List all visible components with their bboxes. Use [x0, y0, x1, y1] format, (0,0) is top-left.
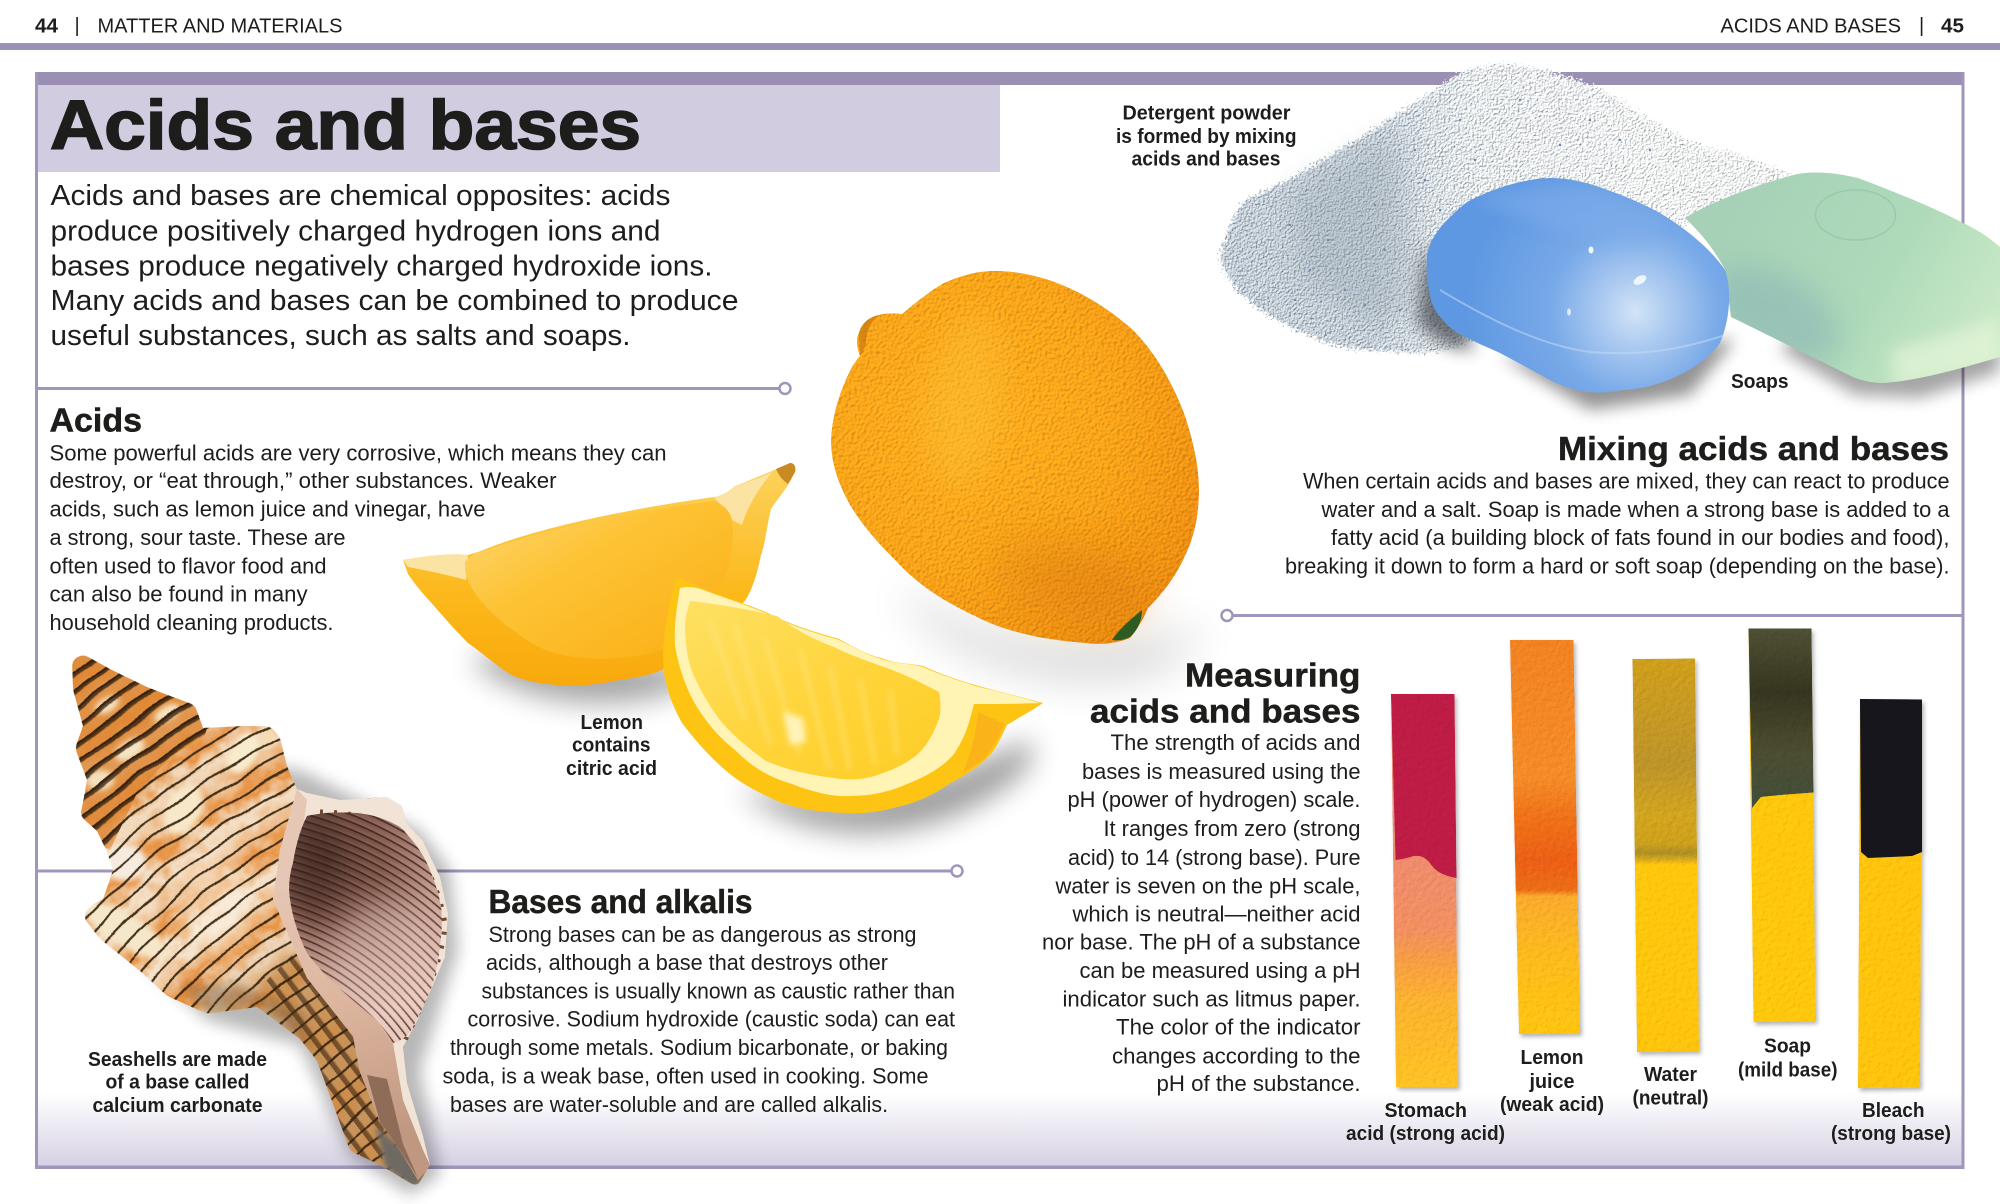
caption: detergent powder — [1116, 102, 1296, 170]
section: mixing acids and bases: water and a salt. Soap is made when a strong base is added to a — [1321, 497, 1950, 522]
pH strip: soap — [1748, 628, 1816, 1022]
section: measuring acids and bases: can be measured using a pH — [1080, 958, 1360, 983]
caption: soaps: Soaps — [1731, 371, 1788, 393]
caption: lemon juice: juice — [1529, 1071, 1574, 1093]
page header: 45 — [1941, 16, 1964, 38]
caption: bleach — [1831, 1100, 1951, 1145]
section: measuring acids and bases: indicator such as litmus paper. — [1062, 986, 1360, 1012]
section: measuring acids and bases: Measuring — [1185, 656, 1360, 694]
section: acids: household cleaning products. — [50, 610, 334, 635]
caption: lemon: citric acid — [566, 758, 657, 780]
caption: lemon juice: Lemon — [1520, 1047, 1584, 1069]
caption: stomach acid — [1346, 1100, 1505, 1145]
intro text: useful substances, such as salts and soaps. — [50, 320, 630, 352]
section: measuring acids and bases: acid) to 14 (strong base). Pure — [1068, 845, 1360, 870]
caption: soap — [1738, 1036, 1838, 1082]
intro text: Many acids and bases can be combined to produce — [50, 285, 738, 317]
caption: soap: (mild base) — [1738, 1060, 1838, 1082]
photo: whole lemon — [831, 271, 1200, 674]
page header — [0, 15, 2000, 50]
section: measuring acids and bases: bases is measured using the — [1082, 759, 1360, 784]
caption: detergent powder: acids and bases — [1132, 148, 1280, 170]
section: measuring acids and bases: It ranges from zero (strong — [1104, 816, 1360, 841]
section: bases and alkalis: bases are water-soluble and are called alkalis. — [450, 1092, 888, 1117]
caption: water — [1632, 1064, 1708, 1110]
section: mixing acids and bases: breaking it down to form a hard or soft soap (depending on the base). — [1285, 554, 1950, 578]
pH strip: stomach acid — [1391, 694, 1458, 1087]
photo: lemon wedge front — [663, 578, 1043, 833]
section: bases and alkalis: Strong bases can be as dangerous as strong — [488, 922, 916, 947]
section: mixing acids and bases: Mixing acids and bases — [1558, 430, 1949, 467]
title — [38, 85, 1000, 172]
section: acids: can also be found in many — [50, 582, 308, 606]
section: measuring acids and bases: water is seven on the pH scale, — [1055, 874, 1360, 898]
section: bases and alkalis: through some metals. Sodium bicarbonate, or baking — [450, 1035, 948, 1060]
pH strip: lemon juice — [1510, 640, 1580, 1034]
page header: | — [74, 15, 80, 37]
section: acids: destroy, or “eat through,” other substances. Weaker — [50, 468, 556, 493]
intro text: Acids and bases are chemical opposites: acids — [50, 180, 670, 212]
section: measuring acids and bases: The color of the indicator — [1116, 1014, 1360, 1040]
caption: bleach: (strong base) — [1831, 1123, 1951, 1145]
section: mixing acids and bases — [1285, 430, 1950, 578]
caption: water: Water — [1644, 1064, 1697, 1086]
section: acids: often used to flavor food and — [50, 554, 326, 578]
caption: seashell: of a base called — [106, 1072, 250, 1094]
caption: stomach acid: Stomach — [1384, 1100, 1467, 1122]
intro text: produce positively charged hydrogen ions and — [50, 216, 660, 248]
caption: lemon juice: (weak acid) — [1500, 1094, 1604, 1116]
section: measuring acids and bases: acids and bases — [1090, 692, 1360, 730]
photo: seashell — [60, 640, 460, 1200]
photo: green soap — [1680, 165, 2000, 398]
section: bases and alkalis — [442, 883, 955, 1117]
section: measuring acids and bases: nor base. The pH of a substance — [1042, 930, 1360, 954]
intro text — [50, 180, 738, 352]
caption: water: (neutral) — [1632, 1088, 1708, 1110]
intro text: bases produce negatively charged hydroxide ions. — [50, 250, 712, 282]
caption: stomach acid: acid (strong acid) — [1346, 1123, 1505, 1145]
caption: bleach: Bleach — [1862, 1100, 1924, 1122]
pH strip: bleach — [1858, 699, 1922, 1088]
caption: lemon juice — [1500, 1047, 1604, 1116]
caption: lemon: contains — [572, 734, 650, 756]
photo: detergent powder — [1220, 65, 1792, 353]
page header: | — [1919, 15, 1924, 37]
divider with end circle — [38, 866, 962, 876]
section: mixing acids and bases: fatty acid (a building block of fats found in our bodies and food), — [1331, 525, 1950, 550]
section: acids: acids, such as lemon juice and vinegar, have — [50, 496, 486, 522]
section: acids: a strong, sour taste. These are — [50, 525, 346, 550]
caption: lemon — [566, 712, 657, 780]
section: measuring acids and bases: pH (power of hydrogen) scale. — [1068, 787, 1360, 812]
caption: detergent powder: is formed by mixing — [1116, 126, 1296, 148]
caption: seashell: calcium carbonate — [92, 1095, 262, 1117]
section: bases and alkalis: acids, although a base that destroys other — [486, 950, 888, 975]
section: bases and alkalis: soda, is a weak base, often used in cooking. Some — [442, 1064, 928, 1088]
page header: ACIDS AND BASES — [1720, 16, 1901, 38]
section: measuring acids and bases: changes according to the — [1112, 1044, 1360, 1068]
section: measuring acids and bases: pH of the substance. — [1156, 1071, 1360, 1096]
caption: seashell: Seashells are made — [88, 1049, 267, 1071]
section: acids — [50, 402, 666, 635]
section: measuring acids and bases: which is neutral—neither acid — [1071, 902, 1360, 926]
section: mixing acids and bases: When certain acids and bases are mixed, they can react to produce — [1303, 468, 1950, 494]
page header: MATTER AND MATERIALS — [98, 16, 342, 38]
caption: detergent powder: Detergent powder — [1122, 102, 1291, 124]
section: bases and alkalis: corrosive. Sodium hydroxide (caustic soda) can eat — [468, 1006, 955, 1032]
photo: lemon wedge back — [403, 463, 795, 703]
section: measuring acids and bases — [1042, 656, 1360, 1096]
caption: soap: Soap — [1764, 1036, 1811, 1058]
photo: blue soap — [1420, 170, 1740, 410]
caption: lemon: Lemon — [580, 712, 643, 734]
section: measuring acids and bases: The strength of acids and — [1110, 730, 1360, 755]
caption: seashell — [88, 1049, 267, 1117]
section: acids: Acids — [50, 402, 142, 438]
divider with end circle — [38, 383, 790, 394]
section: bases and alkalis: substances is usually known as caustic rather than — [482, 978, 955, 1004]
title: Acids and bases — [50, 86, 641, 164]
section: bases and alkalis: Bases and alkalis — [488, 883, 752, 920]
page header: 44 — [35, 16, 59, 38]
section: acids: Some powerful acids are very corrosive, which means they can — [50, 440, 666, 466]
pH strip: water — [1632, 658, 1699, 1052]
divider with end circle — [1222, 610, 1962, 621]
